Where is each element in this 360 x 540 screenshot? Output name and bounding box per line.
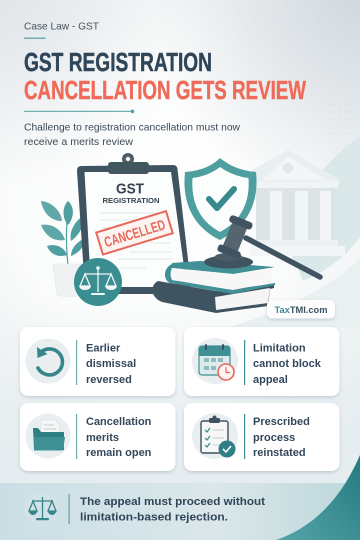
card text: Prescribed (253, 416, 310, 428)
title rule with dot (24, 110, 134, 113)
illustration: plant (41, 201, 85, 265)
decorative dots (329, 104, 350, 134)
icon: folder (26, 414, 70, 458)
card text (86, 342, 136, 386)
card text: process (253, 432, 295, 444)
subtitle: receive a merits review (24, 136, 133, 148)
footer icon: scales (24, 492, 60, 526)
card text: merits (86, 432, 119, 444)
card text: Cancellation (86, 416, 152, 428)
divider (76, 414, 77, 459)
card: limitation cannot block appeal (184, 327, 340, 396)
card text: Earlier (86, 342, 121, 354)
card text: appeal (253, 374, 288, 386)
card: cancellation merits remain open (20, 403, 176, 471)
divider (244, 340, 245, 385)
footer message: limitation-based rejection. (80, 512, 228, 524)
category underline (24, 38, 46, 39)
check mark (209, 189, 234, 208)
card text: cannot block (253, 358, 322, 370)
card text (253, 342, 322, 386)
divider (244, 414, 245, 459)
footer message (80, 496, 265, 524)
card text: Limitation (253, 342, 306, 354)
form lines (100, 213, 173, 268)
icon: calendar with clock (192, 338, 238, 384)
card text: dismissal (86, 358, 136, 370)
subtitle (24, 122, 240, 148)
icon: checklist (192, 413, 238, 459)
card text: reversed (86, 374, 132, 386)
illustration: upper book (165, 261, 275, 294)
footer band (0, 455, 360, 540)
title: GST REGISTRATION (24, 47, 212, 77)
illustration: temple (250, 150, 345, 256)
footer divider (68, 494, 70, 524)
form heading: REGISTRATION (102, 196, 160, 205)
illustration: clipboard (77, 153, 192, 294)
clipboard clip (108, 153, 149, 174)
website badge (267, 300, 335, 318)
form heading: GST (116, 180, 144, 198)
illustration: shield (184, 158, 257, 240)
card text (86, 416, 152, 459)
title (24, 47, 306, 105)
card text: reinstated (253, 447, 306, 459)
category label: Case Law - GST (24, 20, 100, 32)
form heading (102, 180, 160, 205)
card: earlier dismissal reversed (20, 327, 176, 396)
card text: remain open (86, 447, 152, 459)
card: prescribed process reinstated (184, 403, 340, 471)
stamp: cancelled (96, 211, 173, 255)
illustration: gavel (204, 214, 320, 277)
illustration: scales badge (74, 258, 122, 306)
stamp: cancelled: CANCELLED (102, 217, 167, 251)
divider (76, 340, 77, 385)
illustration: plant pot (53, 264, 84, 296)
website badge: TaxTMI.com (274, 305, 328, 316)
icon: undo arrow (26, 338, 70, 384)
footer message: The appeal must proceed without (80, 496, 265, 508)
subtitle: Challenge to registration cancellation must now (24, 122, 240, 134)
card text (253, 416, 310, 459)
illustration: lower book (152, 281, 274, 313)
